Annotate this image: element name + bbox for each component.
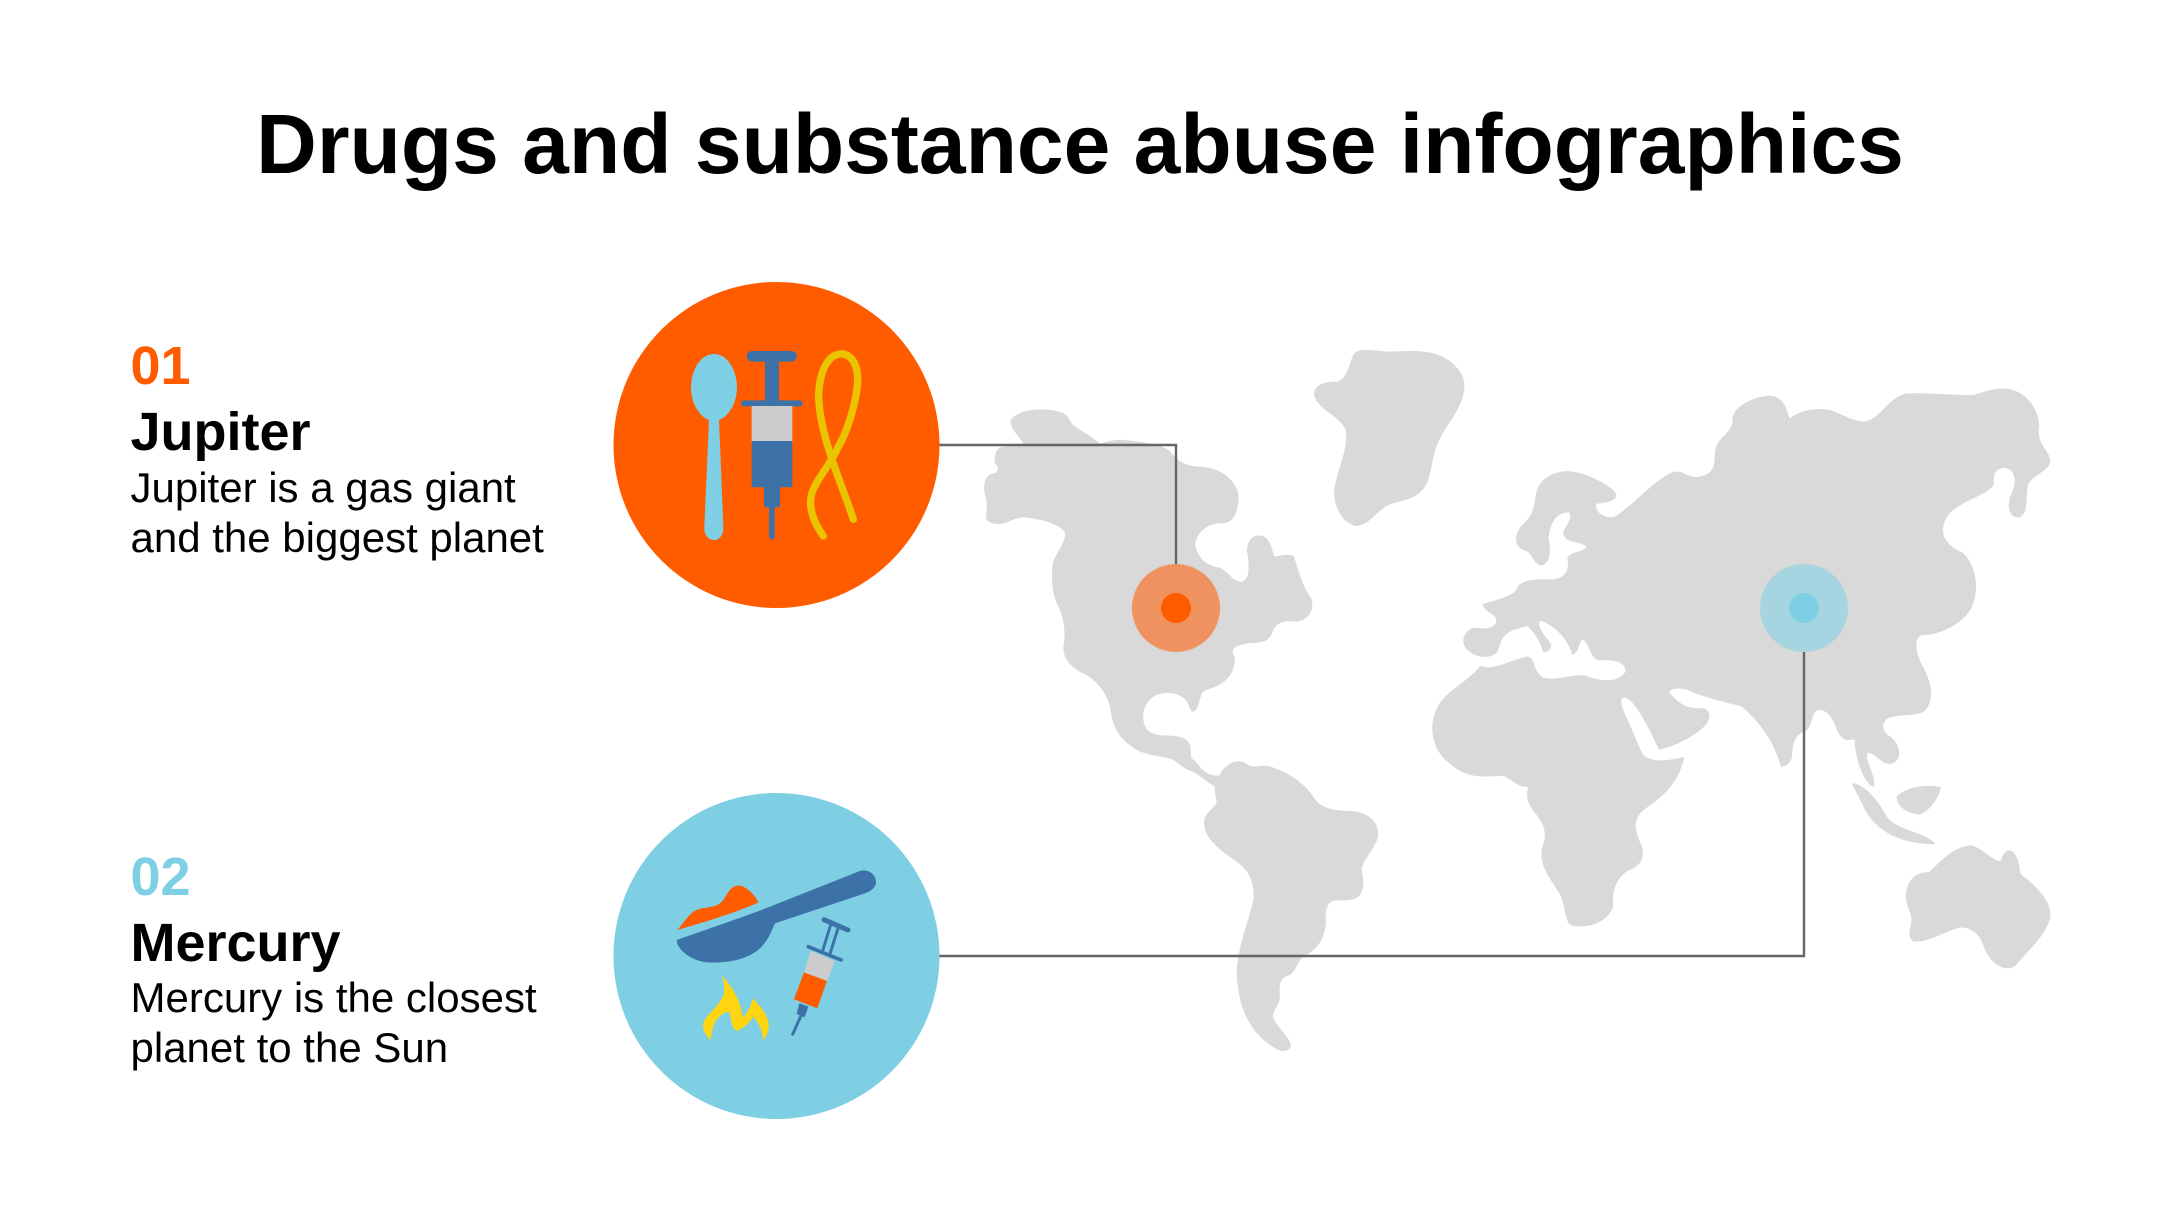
heading Mercury: Mercury <box>130 913 341 973</box>
item 02 text block <box>130 847 537 1071</box>
map: North and Central America <box>984 409 1312 787</box>
connector: Jupiter to North America <box>939 445 1176 564</box>
icon: large spoon <box>677 870 876 962</box>
map marker: Asia <box>1760 564 1848 652</box>
heading Jupiter: Jupiter <box>130 402 311 462</box>
map: Indonesian islands <box>1852 783 1941 844</box>
title: Drugs and substance abuse infographics <box>256 97 1904 191</box>
map: Eurasia and Africa <box>1432 389 2050 927</box>
icon: tourniquet ribbon <box>811 354 858 536</box>
description Mercury: Mercury is the closest <box>130 974 537 1021</box>
icon: spoon <box>691 354 737 540</box>
number 02: 02 <box>130 847 191 907</box>
icon: flame <box>703 975 769 1040</box>
map: South America <box>1204 761 1378 1051</box>
description Mercury: planet to the Sun <box>130 1024 448 1071</box>
icon: small syringe <box>793 920 848 1034</box>
item 01 text block <box>130 336 544 561</box>
icon circle 01: spoon, syringe, tourniquet <box>614 282 940 608</box>
icon: powder <box>677 886 758 930</box>
number 01: 01 <box>130 336 191 396</box>
description Jupiter: and the biggest planet <box>130 514 544 561</box>
icon circle 02: heated spoon and syringe <box>614 793 940 1119</box>
map: Australia <box>1906 845 2050 968</box>
description Jupiter: Jupiter is a gas giant <box>130 464 516 511</box>
icon: syringe <box>741 351 803 539</box>
map: Greenland <box>1314 350 1464 526</box>
world map <box>984 350 2050 1051</box>
map marker: North America <box>1132 564 1220 652</box>
connector: Mercury to Asia <box>939 652 1804 956</box>
